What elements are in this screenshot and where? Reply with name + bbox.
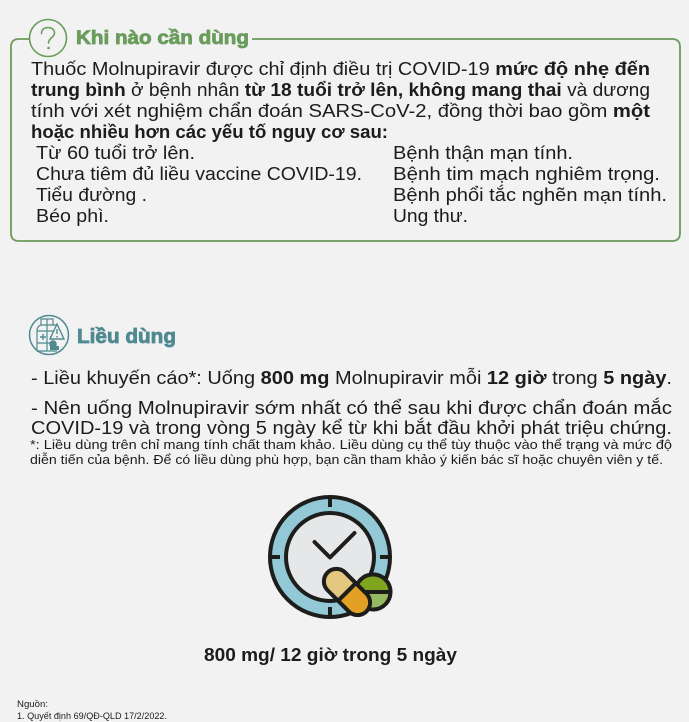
footnote: diễn tiến của bệnh. Để có liều dùng phù hợp, bạn cần tham khảo ý kiến bác sĩ hoặc chuyên viên y tế. — [30, 452, 663, 467]
text block: indication: Thuốc Molnupiravir được chỉ định điều trị COVID-19 mức độ nhẹ đến — [31, 59, 650, 79]
source note: 1. Quyết định 69/QĐ-QLD 17/2/2022. — [17, 711, 167, 722]
panel: when to use — [11, 20, 680, 241]
text block: indication: hoặc nhiều hơn các yếu tố nguy cơ sau: — [31, 122, 388, 142]
source note — [17, 699, 167, 722]
list: risk factors left: Tiểu đường . — [36, 185, 147, 205]
footnote — [30, 437, 672, 467]
text block: indication — [31, 59, 650, 142]
footnote: *: Liều dùng trên chỉ mang tính chất tham khảo. Liều dùng cụ thể tùy thuộc vào thể trạng và mức độ — [30, 437, 672, 452]
list: risk factors right: Bệnh phổi tắc nghẽn mạn tính. — [393, 184, 667, 205]
list: risk factors right: Ung thư. — [393, 206, 468, 226]
list: risk factors left: Béo phì. — [36, 206, 109, 226]
heading: dosage: Liều dùng — [77, 326, 176, 348]
icon: round pill — [356, 574, 390, 610]
heading: when to use: Khi nào cần dùng — [76, 28, 249, 49]
panel border — [11, 39, 680, 241]
icon: clock with pills — [270, 497, 390, 620]
list: risk factors left — [36, 143, 362, 226]
list: risk factors right: Bệnh thận mạn tính. — [393, 143, 573, 163]
list: risk factors left: Từ 60 tuổi trở lên. — [36, 143, 195, 163]
text block: indication: tính với xét nghiệm chẩn đoán SARS-CoV-2, đồng thời bao gồm một — [31, 101, 650, 121]
caption: dosage summary: 800 mg/ 12 giờ trong 5 ngày — [204, 645, 457, 665]
list: risk factors right: Bệnh tim mạch nghiêm trọng. — [393, 164, 660, 184]
icon: question mark — [30, 20, 66, 56]
list: risk factors left: Chưa tiêm đủ liều vaccine COVID-19. — [36, 164, 362, 184]
source note: Nguồn: — [17, 699, 48, 710]
text block: dosage recommendation: - Liều khuyến cáo*: Uống 800 mg Molnupiravir mỗi 12 giờ trong 5 ngày . — [31, 367, 672, 388]
text block: indication: trung bình ở bệnh nhân từ 18 tuổi trở lên, không mang thai và dương — [31, 80, 650, 100]
text block: early use: - Nên uống Molnupiravir sớm nhất có thể sau khi được chẩn đoán mắc — [31, 397, 672, 418]
list: risk factors right — [393, 143, 667, 226]
icon: medicine bottle with warning — [30, 316, 68, 354]
text block: early use — [31, 397, 672, 438]
text block: early use: COVID-19 và trong vòng 5 ngày kể từ khi bắt đầu khởi phát triệu chứng. — [31, 417, 672, 438]
icon: capsule — [319, 564, 375, 620]
